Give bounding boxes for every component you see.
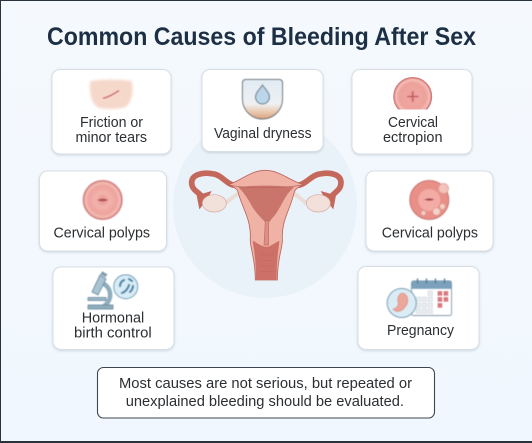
panel: vaginal dryness bbox=[202, 70, 323, 152]
panel: cervical ectropion bbox=[352, 70, 472, 154]
label: Cervical polyps bbox=[54, 226, 150, 242]
label: birth control bbox=[74, 326, 152, 342]
title: Common Causes of Bleeding After Sex bbox=[47, 23, 476, 51]
callout: bottom note: unexplained bleeding should be evaluated. bbox=[126, 393, 404, 410]
icon: cervix with polyps bbox=[410, 180, 449, 220]
background circle bbox=[173, 114, 357, 298]
panel: cervical polyps left bbox=[40, 171, 166, 251]
panel: cervical polyps right bbox=[366, 171, 493, 251]
label: Friction or bbox=[80, 115, 143, 131]
label: Cervical bbox=[388, 115, 438, 131]
icon: skin tear bbox=[90, 80, 133, 109]
callout: bottom note: Most causes are not serious, but repeated or bbox=[119, 375, 412, 392]
central illustration: uterus bbox=[192, 170, 341, 280]
icon: dryness droplet bbox=[242, 80, 282, 119]
icon: embryo bbox=[387, 288, 416, 318]
label bbox=[74, 311, 152, 342]
label: Pregnancy bbox=[387, 323, 455, 339]
label: Vaginal dryness bbox=[214, 126, 312, 142]
panel: pregnancy bbox=[358, 266, 479, 350]
panel: hormonal birth control bbox=[53, 267, 174, 350]
icon: calendar bbox=[412, 278, 452, 316]
callout: bottom note bbox=[98, 368, 434, 418]
label: minor tears bbox=[76, 130, 147, 146]
icon: cervix bbox=[83, 180, 122, 220]
icon: bacteria dish bbox=[114, 275, 138, 299]
panel: friction or minor tears bbox=[52, 70, 171, 154]
label bbox=[76, 115, 147, 146]
label bbox=[383, 115, 442, 146]
label: Hormonal bbox=[82, 311, 144, 327]
label: Cervical polyps bbox=[382, 226, 478, 242]
label: ectropion bbox=[383, 130, 442, 146]
icon: microscope bbox=[88, 271, 113, 309]
icon: ectropion cervix bbox=[393, 77, 432, 110]
